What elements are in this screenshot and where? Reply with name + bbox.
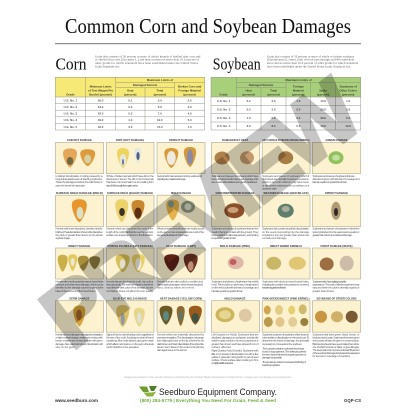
table: corn grades: 0.5 <box>128 112 133 116</box>
panel: heat damage limit <box>157 244 205 290</box>
panel: insect damage: Kernels with tunnels caused by insects, bored holes <box>56 280 104 284</box>
panel: blue-eye mold damage: the size of the mold. Including removal of kernel <box>106 336 154 340</box>
panel: damaged by heat: been discolored and/or damaged. Average color <box>212 177 259 181</box>
intro: soybean: have been established under the United States Grain Standards Act. <box>267 65 351 69</box>
table: corn grades: Broken Corn and <box>178 84 202 88</box>
table: corn grades: Grade <box>66 93 75 97</box>
panel: germ damage: brown or darkened embryo that are with germ <box>56 339 103 343</box>
panel: surface mold damage: Kernels which are discolored, streaked and/or <box>56 227 103 231</box>
panel: heat damage yellow corn: kernel. Germ tissue in the center is the primary <box>157 345 205 349</box>
panel: soybeans of other colors: bicolored seed coats. Soybeans that have green <box>312 336 360 340</box>
panel: pink bean insect kernels: The bug was contains a yellowish kernel spot <box>262 346 304 350</box>
panel: soybeans of other colors: The seed coat color must cover at least 50 percent <box>312 348 360 352</box>
panel: weather damage gray black: on the seed coat cutting into the damage <box>262 230 310 234</box>
panel: surface mold damage: the parts or greater than shown on the actual <box>56 233 103 237</box>
table: corn grades: 15.0 <box>157 125 163 129</box>
intro: soybean <box>267 54 359 69</box>
table: soybean grades: Grade <box>219 93 228 97</box>
table: soybean grades: Total <box>270 88 277 92</box>
heading: corn: Corn <box>56 54 86 73</box>
panel: cob rot damage: open the kernel for inspection. <box>56 183 86 187</box>
panel: surface mold damage: SURFACE MOLD DAMAGE (MOLD) <box>56 191 103 195</box>
panel: mold damage soybean <box>212 296 260 365</box>
table: soybean grades: 3.0 <box>271 108 276 112</box>
table: corn grades: 0.1 <box>128 98 133 102</box>
panel: insect damage: by larvae and other insect damage, which can be <box>56 283 104 287</box>
table: corn grades: 49.0 <box>98 118 104 122</box>
table: corn grades: Foreign Material <box>178 88 201 92</box>
panel: pink bean insect kernels: determine the extent of damage, it is generally <box>262 339 310 343</box>
panel: mold damage: MOLD DAMAGE <box>171 191 191 195</box>
panel: mold damage soybean: MOLD DAMAGE <box>224 296 246 300</box>
panel: ground frosted damage: Soybeans and pieces of soybeans that are the <box>212 227 259 231</box>
panel: surface mold damage <box>56 191 104 240</box>
table: corn grades: 5.0 <box>188 118 192 122</box>
panel: heat damage limit: HEAT DAMAGE (LIMIT) <box>166 244 196 248</box>
panel: mold damage pink: mold. This includes a mold-mass. A single strand <box>212 283 259 287</box>
table: soybean grades: Heat <box>245 88 252 92</box>
panel: blue-eye mold damage: containing. Blue mold stained, grey-green stain <box>106 339 154 343</box>
panel: mold damage soybean: discolored, damaged, or mold-grown, and are with <box>212 336 259 340</box>
panel: mold damage soybean: little or no apparent discoloration but with a fine <box>212 352 259 356</box>
table: soybean grades: U.S. No. 4 <box>217 124 231 128</box>
panel: germ damage: damage. Also called sick wheat. Discoloration will <box>56 342 103 346</box>
table: soybean grades: 1.0 <box>296 99 301 103</box>
panel: dirt hot damage: that have not turned with hot air resulting from <box>106 180 155 184</box>
panel: dirt hot damage: stored. Mold is usually fine on grain or cobs. <box>106 183 139 187</box>
panel: pink bean insect kernels: damage is impossible. <box>262 356 282 360</box>
panel: heat damage yellow corn: from slight gold color on the tip of kernel to the <box>157 339 204 343</box>
logo: seedburo mark <box>139 386 157 396</box>
panel: cob rot damage: Is distinct discoloration or rotting caused by a <box>56 174 103 178</box>
table: soybean grades: 0.5 <box>247 108 251 112</box>
panel: sprout damage: Kernels which are sprouted or show evidence of <box>157 174 202 178</box>
panel: insect damage <box>56 244 104 293</box>
panel: sprout damage soybean: greater than shown is considered damage. <box>312 233 353 237</box>
panel: heat damage yellow corn: damaged tissue in the kernel. <box>157 348 187 352</box>
website: www.seedburo.com <box>54 398 98 403</box>
panel: pink bean insect kernels: Soybeans or pieces of soybeans which show an <box>262 332 310 336</box>
table: soybean grades: 5.0 <box>296 124 301 128</box>
panel: cob rot damage: COB ROT DAMAGE <box>67 138 92 142</box>
table: corn grades: U.S. No. 5 <box>64 125 78 129</box>
panel: heat damage yellow corn: HEAT DAMAGE (YELLOW CORN) <box>160 296 202 300</box>
panel: purple plumule: show a plumule. The evidence of germ in the kernel <box>106 283 154 287</box>
table: soybean grades: U.S. No. 1 <box>217 99 231 103</box>
table: soybean grades: 2.0 <box>346 108 351 112</box>
table: soybean grades: (percent) <box>317 93 329 97</box>
panel: heat damage soybeans: HEAT DAMAGE SOYBEANS (ORANGE KERNELS) <box>262 138 310 142</box>
table: soybean grades <box>211 77 361 130</box>
table: soybean grades: U.S. No. 2 <box>217 108 231 112</box>
panel: frost damage white: Soybeans which have a glassy, waxy-like <box>312 280 347 284</box>
table: corn grades: 3.0 <box>158 98 162 102</box>
panel: mold damage: on the germ or are represented at a mold of the <box>157 230 204 234</box>
table: corn grades: 3.0 <box>188 105 192 109</box>
table: corn grades: 54.0 <box>98 105 104 109</box>
panel: dirt hot damage: Whole or broken kernels which have dirt on the <box>106 174 154 178</box>
panel: mold damage soybean: greater than shown and have at least 3 mm of <box>212 342 259 346</box>
panel: soybeans of other colors: of the seed coat. Damaged soybeans to be assessed <box>312 351 360 355</box>
panel: mold damage soybean: yellow or greenish mold growth on part of seed <box>212 355 259 359</box>
panel: green damage: discolored green with at least of coverage and <box>312 177 360 181</box>
panel: heat damage soybeans: which is not color distinct; may have been <box>262 180 310 184</box>
panel: insect damage: base of the kernel and the bored holes. <box>56 289 96 293</box>
panel: purple plumule: mold that the dark color of hot damage, but are <box>106 286 154 290</box>
panel: green damage: GREEN DAMAGE <box>326 138 348 142</box>
panel: surface mold blight damage: length of the mold significantly over the pericarp <box>106 230 154 234</box>
panel: sprout damage: SPROUT DAMAGE <box>169 138 193 142</box>
panel: purple plumule <box>106 244 154 293</box>
title: Common Corn and Soybean Damages <box>65 14 351 38</box>
table: soybean grades: 20.0 <box>320 108 326 112</box>
panel: mold damage pink: intensity equal to or greater shown. <box>212 289 244 293</box>
panel: purple plumule: Kernels that are discolored by mold, hot mold or <box>106 280 153 284</box>
table: soybean grades: 10.0 <box>320 99 326 103</box>
table: corn grades: 56.0 <box>98 98 104 102</box>
panel: blue-eye mold damage: which affect mold spores, on the germ of kernels <box>106 342 154 346</box>
heading: soybean: Soybean <box>213 54 261 73</box>
table: corn grades: U.S. No. 3 <box>64 112 78 116</box>
panel: weather damage gray black: Soybeans that contain long-thick discoloration <box>262 227 310 231</box>
intro: corn: or shelled flint corn (Zea mays L.) and may contain not more than 10.0 percent of <box>95 58 199 62</box>
panel: mold damage pink <box>212 244 260 293</box>
panel: heat damage soybeans: or discolored cotyledons the cut surface on a <box>262 183 310 187</box>
table: soybean grades: 2.0 <box>271 99 276 103</box>
table: corn grades: 0.2 <box>128 105 133 109</box>
table: soybean grades: 8.0 <box>271 124 276 128</box>
panel: dirt hot damage: discolored or kernel. The dirt on the hot kernels <box>106 177 154 181</box>
table: corn grades: 1.0 <box>128 118 133 122</box>
table: corn grades: 5.0 <box>158 105 162 109</box>
panel: mold damage soybean: on slightly variable soybeans. <box>212 361 234 365</box>
panel: surface mold blight damage <box>106 191 154 237</box>
panel: pink bean insect kernels: the stem lot and this seed is bug-stung beans or <box>262 352 306 356</box>
panel: surface mold damage: soybean image. <box>56 236 71 240</box>
panel: weather damage gray black: WEATHER DAMAGE (GRAY/BLACK) <box>264 191 309 195</box>
panel: ground frosted damage: is equal to or greater shown. <box>212 236 237 240</box>
table: corn grades: Heat <box>127 88 133 92</box>
panel: soybeans of other colors: SOYBEANS OF OTHER COLORS <box>316 296 357 300</box>
panel: insect bored kernels: insect-feeding, are bored kernels. <box>262 286 287 290</box>
table: corn grades: 4.0 <box>188 112 192 116</box>
panel: sprout damage soybean: sprout protrudes from the seed coat or equal to or <box>312 230 360 234</box>
panel: sprout damage <box>157 138 205 181</box>
panel: damaged by heat <box>212 138 260 184</box>
table: corn grades: 2.0 <box>188 98 192 102</box>
table: corn grades: Maximum Limits of <box>147 78 173 82</box>
table: soybean grades: Maximum Limits of <box>285 78 312 82</box>
table: corn grades: (percent) <box>154 93 166 97</box>
panel: weather damage gray black: cotyledons any are greater than shown are <box>262 233 310 237</box>
panel: heat damage soybeans: Soybeans and pieces of soybeans which if <box>262 174 309 178</box>
table: corn grades: Bushel (pounds) <box>89 93 112 97</box>
panel: frost damage white: vary and when the color is intensity equal to or <box>312 286 360 290</box>
panel: pink bean insect kernels: PINK BEE/DISINSECT (PINK KERNEL) <box>262 296 310 300</box>
intro: soybean: sieve and not more than 10.0 percent of other grains for which standards <box>267 61 359 65</box>
table: corn grades: Minimum Limits <box>90 84 112 88</box>
panel: heat damage yellow corn: excessive respiration. The discoloration may range <box>157 336 204 340</box>
panel: insect bored kernels <box>262 244 310 290</box>
company name: Seedburo Equipment Company. <box>159 387 277 397</box>
table: soybean grades: 30.0 <box>320 116 326 120</box>
table: soybean grades: U.S. No. 3 <box>217 116 231 120</box>
panel: pink bean insect kernels: The kernels are colored in suspected shrinking or <box>262 360 306 364</box>
panel: heat damage soybeans <box>262 138 310 190</box>
table: corn grades: (percent) <box>124 93 137 97</box>
table: corn grades: 46.0 <box>98 125 104 129</box>
table: soybean grades: 2.0 <box>296 108 301 112</box>
table: soybean grades: Other Colors <box>339 88 357 92</box>
panel: blue-eye mold damage: Signs of blue to mold showing mold, regardless of <box>106 332 154 336</box>
panel: insect bored kernels: INSECT BORED KERNELS <box>270 244 302 248</box>
panel: purple plumule: not distinct. Does not affect the corn quality. <box>106 289 154 293</box>
panel: germ damage: vary on the germ. <box>56 345 76 349</box>
table: corn grades: U.S. No. 2 <box>64 105 78 109</box>
panel: dirt hot damage <box>106 138 155 187</box>
panel: green damage <box>312 138 360 184</box>
panel: mold damage soybean: surface. Check surface after cracking or if it is <box>212 358 259 362</box>
panel: blue-eye mold damage: mold. Growth is more pervasive. <box>106 345 140 349</box>
panel: blue-eye mold damage <box>106 296 154 349</box>
panel: heat damage yellow corn: Kernels which are materially discolored by <box>157 332 205 336</box>
panel: soybeans of other colors: Soybeans that have green, black, brown, or <box>312 332 360 336</box>
panel: surface mold blight damage: surface are at least as shown in the illustration. <box>106 233 154 237</box>
table: soybean grades: 3.0 <box>247 124 251 128</box>
panel: germ damage: or high-moisture storage, weakened, embryo with <box>56 336 103 340</box>
table: corn grades: of Test Weight Per <box>88 88 114 92</box>
table: soybean grades: (percent) <box>292 93 305 97</box>
table: soybean grades: 5.0 <box>346 116 351 120</box>
panel: heat damage limit: have a dark-colored germ which shows discolored <box>157 283 203 287</box>
table: soybean grades: (percent) <box>267 93 280 97</box>
intro: corn: Grain that consists of 50 percent or more of whole kernels of shelled dent corn and/ <box>95 54 201 58</box>
table: corn grades: U.S. No. 1 <box>64 98 78 102</box>
panel: frost damage white: greater than shown. <box>312 289 335 293</box>
panel: frost damage white: FROST DAMAGE (WHITE) <box>320 244 353 248</box>
panel: mold damage: Whole or broken kernels which are moldy occurs <box>157 227 205 231</box>
panel: weather damage gray black: considered damage. <box>262 236 287 240</box>
panel: soybeans of other colors: one of which is brown or black, or greenish-gray. <box>312 345 360 349</box>
table: soybean grades: 0.2 <box>247 99 251 103</box>
panel: ground frosted damage: GROUND/FROSTED DAMAGE <box>216 191 255 195</box>
intro: corn <box>95 54 201 69</box>
intro: corn: Grain Standards Act. <box>95 65 120 69</box>
table: soybean grades: Soybeans of <box>340 84 357 88</box>
panel: heat damage limit: hard, distinct within the kernel. <box>157 286 195 290</box>
panel: pink bean insect kernels <box>262 296 310 367</box>
panel: surface mold blight damage: Kernels which are discolored by mold, if the <box>106 227 154 231</box>
panel: heat damage soybeans: discolored are internally heat-fixed soybeans, <box>262 177 309 181</box>
panel: insect damage: identified by the damage caused to germ at the <box>56 286 104 290</box>
panel: sprout damage soybean: Soybeans and pieces of soybeans in which the <box>312 227 360 231</box>
panel: purple plumule: PURPLE PLUMULE (HOT DAMAGE) <box>108 244 153 248</box>
table: corn grades: 7.0 <box>158 112 162 116</box>
table: soybean grades: (percent) <box>342 93 354 97</box>
panel: insect bored kernels: Soybeans with obvious insect-bored holes, <box>262 280 309 284</box>
panel: green damage: intensity equal to or greater than shown. <box>312 180 348 184</box>
panel: pink bean insect kernels: insect-bug soybeans. <box>262 363 280 367</box>
table: soybean grades: 1.0 <box>346 99 351 103</box>
table: corn grades: (percent) <box>183 93 196 97</box>
panel: heat damage yellow corn <box>157 296 205 352</box>
panel: heat damage yellow corn: dark brown and black discoloration throughout the <box>157 342 204 346</box>
table: soybean grades: 5.0 <box>271 116 276 120</box>
panel: cob rot damage <box>56 138 104 187</box>
panel: soybeans of other colors: for kernels in coverage compulsory. <box>312 354 351 358</box>
panel: cob rot damage: fungus that attacks ears of standing soybeans. <box>56 177 103 181</box>
panel: sprout damage soybean: SPROUT DAMAGE <box>325 191 348 195</box>
table: soybean grades: 1.0 <box>247 116 251 120</box>
panel: ground frosted damage: have a distinct mottled appearance, and frosting <box>212 233 259 237</box>
watermark: PREVIEW: PREVIEW <box>22 59 380 367</box>
panel: germ damage: Kernels which contain germ damaged by respiration <box>56 332 103 336</box>
panel: weather damage gray black <box>262 191 310 240</box>
panel: pink bean insect kernels: found on bug soybeans. The stinking bug feeds <box>262 349 307 353</box>
table: corn grades: 10.0 <box>157 118 163 122</box>
table: corn grades <box>55 77 205 130</box>
panel: frost damage white: appearance. The color of affected soybeans may <box>312 283 360 287</box>
table: corn grades: Damaged Kernels <box>133 83 158 87</box>
table: soybean grades: 40.0 <box>320 124 326 128</box>
panel: heat damage limit: Kernels that are often puffed or swollen and <box>157 280 203 284</box>
table: soybean grades: Material <box>293 88 304 92</box>
panel: cob rot damage: These the damage is obvious; the color brown or <box>56 180 103 184</box>
table: corn grades: Total <box>156 88 163 92</box>
table: corn grades: U.S. No. 4 <box>64 118 78 122</box>
panel: sprout damage soybean <box>312 191 360 237</box>
table: soybean grades: 10.0 <box>345 124 351 128</box>
panel: mold damage pink: Soybeans and pieces of soybeans that exhibit <box>212 280 259 284</box>
panel: blue-eye mold damage: BLUE-EYE MOLD DAMAGE <box>113 296 147 300</box>
product code: GQP-CS <box>344 398 361 403</box>
panel: ground frosted damage <box>212 191 260 240</box>
table: corn grades: 52.0 <box>98 112 104 116</box>
panel: insect damage: INSECT DAMAGE <box>68 244 90 248</box>
panel: mold damage soybean: Right (Surface Mold Growth): Soybeans with <box>212 349 259 353</box>
panel: green damage: Soybeans and pieces of soybeans that are <box>312 174 355 178</box>
panel: mold damage soybean: Left (Incipient or Mold): Soybeans that are <box>212 332 259 336</box>
panel: mold damage soybean: visible in gray, medium, the seed coat and or is <box>212 339 259 343</box>
panel: soybeans of other colors: seed coats will also be green in cross-section. <box>312 339 360 343</box>
panel: mold damage <box>157 191 205 237</box>
panel: insect bored kernels: indicating the possible insect presence or weevil, <box>262 283 309 287</box>
panel: ground frosted damage: result of being in contact with the ground. They <box>212 230 259 234</box>
intro: soybean: Grain that consists of 50 percent or more of whole or broken soybeans <box>267 54 355 58</box>
panel: mold damage pink: MOLD DAMAGE (PINK) <box>220 244 250 248</box>
panel: heat damage soybeans: soybean dark. <box>262 186 277 190</box>
phone and tagline: (800) 284-5779 | Everything You Need For Grain, Feed & Seed <box>140 398 276 403</box>
panel: soybeans of other colors <box>312 296 360 358</box>
intro: corn: other grains for which standards have been established under the United States <box>95 61 199 65</box>
panel: surface mold damage: blotched. Heat-discoloration shows white blemishes <box>56 230 103 234</box>
panel: sprout damage: sprouting are considered damage. <box>157 177 186 181</box>
table: soybean grades: Foreign <box>293 84 304 88</box>
panel: germ damage <box>56 296 104 349</box>
table: corn grades: 3.0 <box>128 125 133 129</box>
panel: mold damage soybean: surface affected. <box>212 345 232 349</box>
panel: surface mold blight damage: SURFACE MOLD (BLIGHT) DAMAGE <box>107 191 153 195</box>
title rule <box>55 43 361 44</box>
table: soybean grades: Splits <box>319 88 328 92</box>
panel: germ damage: GERM DAMAGE <box>69 296 89 300</box>
panel: damaged by heat: Soybeans and pieces of soybeans which have <box>212 174 259 178</box>
intro: soybean: (Glycine max (L.) merr.) that will not pass through an 8/64 round-hole <box>267 58 355 62</box>
table: soybean grades: 3.0 <box>296 116 301 120</box>
panel: pink bean insect kernels: necessary to cross-section the soybean. <box>262 342 302 346</box>
panel: dirt hot damage: DIRT (HOT DAMAGE) <box>116 138 144 142</box>
panel: soybeans of other colors: Bicolored soybeans have seed coats of two colors, <box>312 342 360 346</box>
table: soybean grades: Damaged Kernels <box>249 83 274 87</box>
panel: frost damage white <box>312 244 360 293</box>
panel: damaged by heat: DAMAGED BY HEAT <box>222 138 248 142</box>
panel: damaged by heat: are a noticeable darkened or greatly heat-fixed. <box>212 180 258 184</box>
footer note: Images are based on the visual reference published by the United States Department of Agriculture. Images are not displayed at actual size. <box>124 375 292 379</box>
panel: pink bean insect kernels: intermediate or discoloration on the seed coat. To <box>262 336 310 340</box>
table: corn grades: 7.0 <box>188 125 192 129</box>
panel: mold damage: kernel as illustrated in this image. <box>157 233 189 237</box>
table: soybean grades: (percent) <box>242 93 255 97</box>
panel: mold damage pink: on the seed coat with at least of coverage and <box>212 286 259 290</box>
